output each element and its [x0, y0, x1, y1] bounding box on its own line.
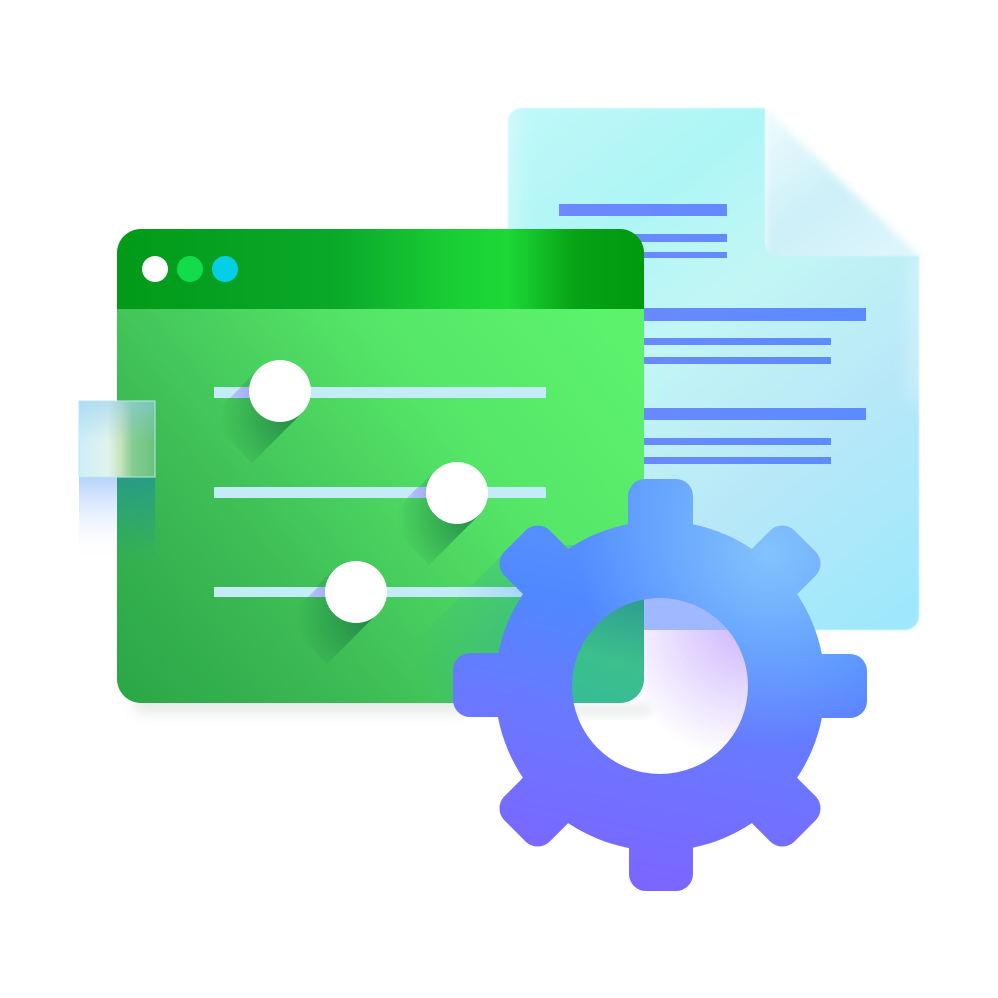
window control dots	[142, 256, 238, 282]
knob shadows	[208, 369, 479, 664]
illustration: settings window, document and gear	[78, 107, 920, 891]
document page	[508, 108, 919, 630]
window body	[117, 229, 644, 703]
track shadow tints	[230, 387, 438, 597]
document text lines	[559, 204, 866, 464]
gear icon	[440, 470, 880, 900]
slider knobs	[249, 360, 488, 623]
track tint near gear	[476, 587, 523, 597]
left floating tag	[79, 401, 155, 562]
document sheet	[508, 108, 919, 630]
window shadow	[135, 692, 465, 712]
slider tracks	[214, 387, 546, 597]
view through gear hole	[572, 598, 748, 744]
document folded corner	[765, 108, 919, 262]
settings window	[117, 229, 644, 703]
window title bar	[117, 229, 644, 309]
gear cast shadow on window	[444, 545, 574, 686]
